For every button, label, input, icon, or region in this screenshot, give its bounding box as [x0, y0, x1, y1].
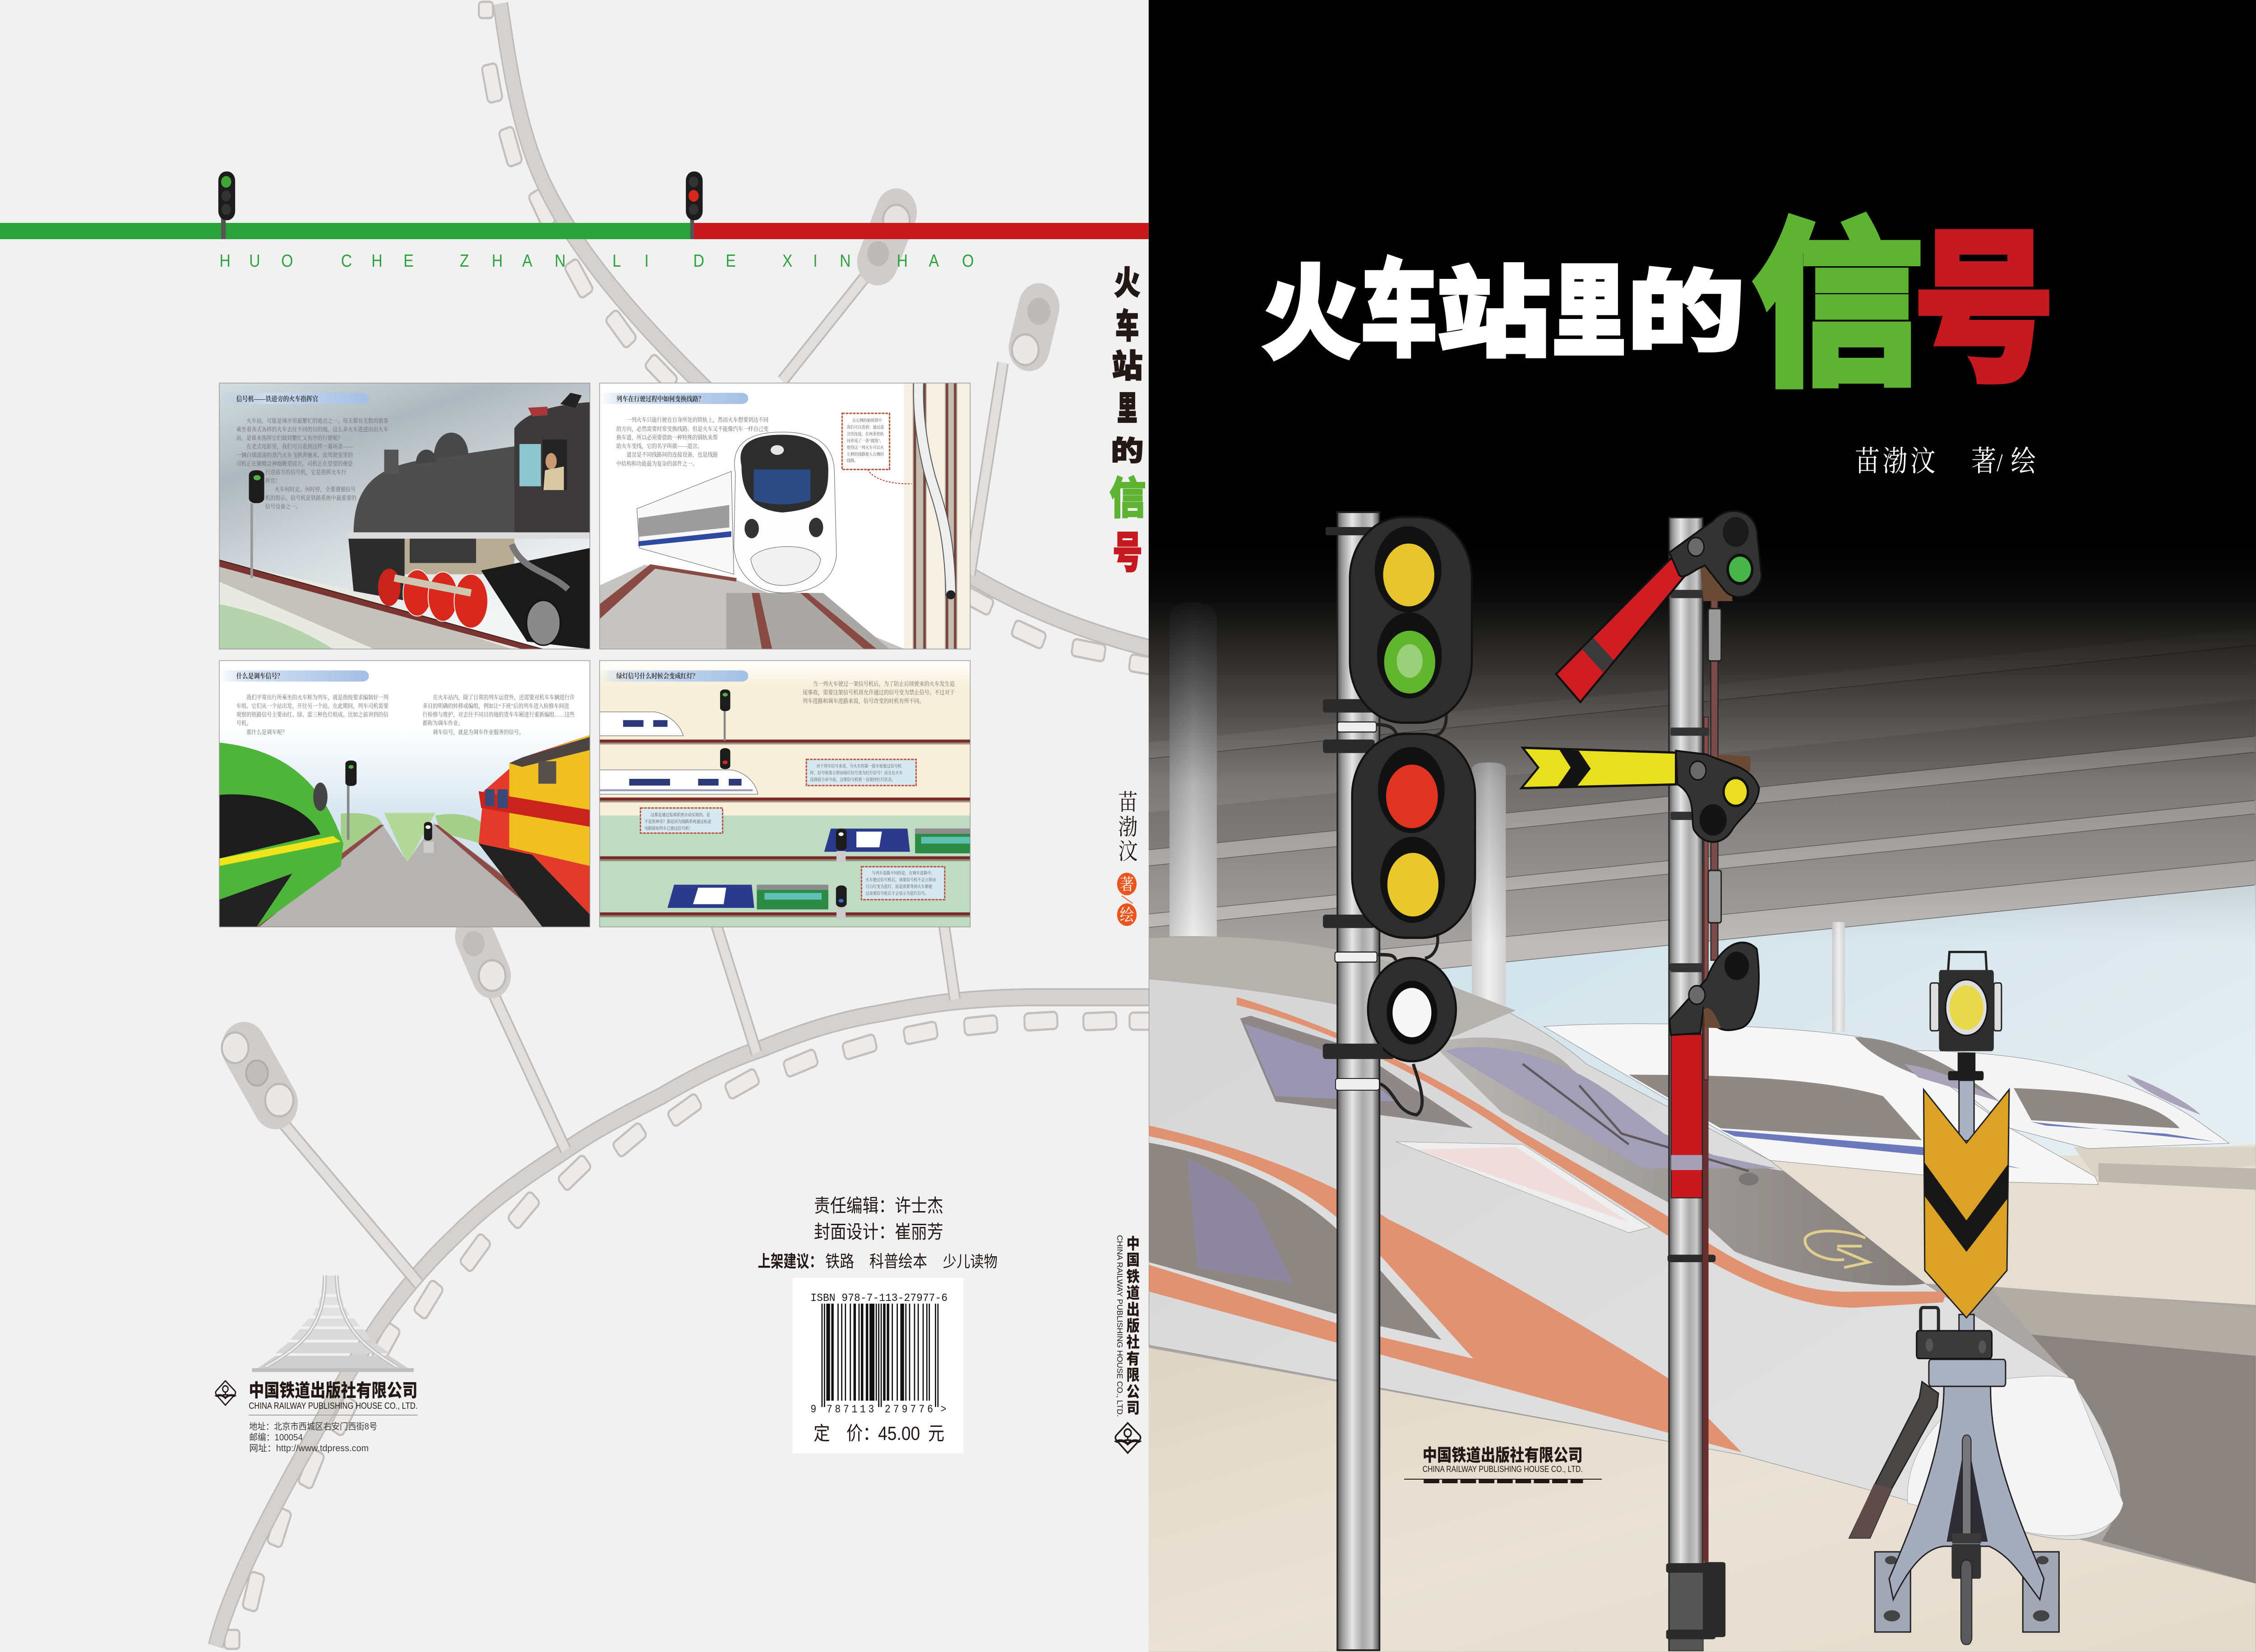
barcode and price box: 787113 — [827, 1404, 874, 1416]
pedestal — [1889, 1386, 2044, 1600]
chevron sign — [1923, 1090, 2009, 1318]
near train — [1149, 936, 2123, 1540]
text: shunting signal page — [236, 672, 575, 736]
text: steam locomotive page: 机的指示。信号机是铁路系统中最重要的 — [265, 494, 356, 501]
signal head: white — [1368, 958, 1456, 1061]
spine publisher: 国 — [1127, 1251, 1140, 1268]
trains and platform — [1149, 936, 2256, 1652]
icon: green signal on bar — [218, 171, 235, 239]
credits block: 封面设计：崔丽芳 — [814, 1222, 943, 1243]
text: high-speed train page: 从右侧的俯视图中 — [852, 417, 882, 423]
green and red signal bar — [0, 223, 1149, 239]
far train — [1911, 1050, 2229, 1148]
text: signal change page: 不是很神奇？那是因为线路系统通过轨道 — [644, 819, 711, 824]
text: shunting signal page: 调车信号，就是为调车作业服务的信号。 — [433, 728, 524, 736]
yellow semaphore arm — [1521, 748, 1676, 788]
text: steam locomotive page — [236, 395, 388, 510]
text: steam locomotive page: 信号设备之一。 — [265, 503, 300, 510]
signal: colour light signal — [1323, 512, 1475, 1650]
spine publisher: 公 — [1127, 1383, 1140, 1400]
text: shunting signal page: 都称为调车作业。 — [423, 719, 463, 727]
spine title — [1110, 265, 1146, 577]
barcode and price box: 9 — [810, 1404, 816, 1416]
spine publisher: 有 — [1127, 1350, 1140, 1367]
title: 火车站里的信号: 号 — [1914, 218, 2054, 402]
publisher english name: CHINA RAILWAY PUBLISHING HOUSE CO., LTD. — [249, 1401, 417, 1411]
text: high-speed train page: 助火车变线，它的名字叫做——道岔。 — [616, 442, 703, 449]
text: steam locomotive page: 一辆白烟滚滚的蒸汽火车飞快奔驰来，而驾驶室里的 — [236, 451, 353, 458]
publisher block: front cover: CHINA RAILWAY PUBLISHING HOUSE CO., LTD. — [1423, 1464, 1583, 1474]
text: high-speed train page: 我们可以看到：通过道 — [847, 424, 884, 430]
publisher block: back cover — [214, 1380, 417, 1453]
signal head: yellow over green — [1350, 517, 1472, 723]
text: steam locomotive page: 站，是谁来指挥它们做到繁忙又有序的行驶呢？ — [236, 434, 343, 441]
spine publisher — [1114, 1235, 1142, 1453]
credits block: 铁路 — [825, 1253, 854, 1271]
text: shunting signal page: 多目的明确的转移或编组，例如让“下班”后的列车进入检修车间进 — [423, 702, 569, 709]
spine title: 信 — [1110, 474, 1146, 523]
barcode and price box — [792, 1278, 964, 1453]
text: high-speed train page: 岔的连接，在两条铁轨 — [847, 431, 884, 437]
credits block: 少儿读物 — [943, 1253, 998, 1270]
spine publisher: CHINA RAILWAY PUBLISHING HOUSE CO., LTD. — [1115, 1235, 1124, 1417]
author line: 绘 — [2011, 445, 2036, 477]
text: shunting signal page: 行检修与维护，对去往不同目的地的货车车厢进行重新编组……这些 — [423, 711, 575, 718]
text: signal change page: 时，信号机需立即由绿灯信号变为红灯信号！而且在火车 — [810, 770, 903, 776]
pale railway track: upper curve — [479, 2, 1163, 676]
panel: steam locomotive page — [219, 383, 590, 649]
spine title: 站 — [1112, 348, 1142, 384]
railway track logo — [252, 1276, 414, 1372]
publisher name: 中国铁道出版社有限公司 — [249, 1380, 417, 1401]
publisher block: front cover — [1404, 1446, 1602, 1483]
panel: signal change page — [600, 661, 970, 927]
spine publisher: 社 — [1127, 1333, 1140, 1351]
title: 火车站里的信号: 信 — [1752, 207, 1923, 407]
text: signal change page: 绿灯信号什么时候会变成红灯？ — [616, 672, 698, 680]
text: signal change page: 没到前方命令前，这架信号机将一直保持红灯状态。 — [810, 777, 895, 782]
text: shunting signal page: 那什么是调车呢？ — [246, 728, 287, 736]
panel: front cover background — [1149, 0, 2256, 1652]
spine author — [1117, 790, 1138, 926]
text: high-speed train page: 列车在行驶过程中如何变换线路？ — [616, 395, 704, 403]
spine publisher: 中 — [1127, 1235, 1140, 1252]
title: 火车站里的信号: 的 — [1627, 263, 1745, 362]
title: 火车站里的信号: 车 — [1361, 252, 1437, 370]
credits block: 责任编辑：许士杰 — [814, 1196, 943, 1217]
icon: spine emblem — [1114, 1423, 1142, 1453]
text: high-speed train page — [616, 395, 884, 467]
barcode and price box: ISBN 978-7-113-27977-6 — [810, 1292, 948, 1304]
signal: shunting indicator with chevron — [1849, 952, 2059, 1645]
text: shunting signal page: 什么是调车信号？ — [236, 672, 283, 680]
text: high-speed train page: 的方向，必然需要时常变换线路。但是火车又不能像汽车一样自己变 — [616, 425, 768, 432]
text: signal change page — [616, 672, 955, 896]
text: high-speed train page: 左侧的线路驶入右侧的 — [847, 451, 884, 457]
spine publisher: 道 — [1127, 1284, 1140, 1301]
text: high-speed train page: 使得这一列火车可以从 — [847, 444, 884, 450]
text: steam locomotive page: 乘坐着各式各样的火车去往不同的目的地。这么多火车进进出出火车 — [236, 426, 388, 433]
credits block — [758, 1196, 998, 1271]
text: high-speed train page: 间形成了一条“渡线”， — [847, 438, 883, 444]
spine author: 苗 — [1118, 790, 1138, 815]
spine author: 渤 — [1118, 815, 1138, 840]
author line: 苗渤汶 — [1855, 445, 1938, 477]
middle semaphore head — [1718, 754, 1750, 771]
address lines: 网址：http://www.tdpress.com — [249, 1443, 369, 1453]
spine publisher: 司 — [1127, 1399, 1140, 1416]
credits block: 科普绘本 — [869, 1253, 927, 1271]
spine title: 的 — [1111, 435, 1144, 467]
spine author: 著 — [1120, 875, 1134, 894]
publisher block: front cover: 中国铁道出版社有限公司 — [1423, 1446, 1583, 1465]
spine author: 绘 — [1120, 906, 1134, 925]
spine publisher: 版 — [1127, 1317, 1140, 1334]
address lines: 地址：北京市西城区右安门西街8号 — [249, 1421, 377, 1431]
price: 价： — [846, 1423, 879, 1444]
pale signal posts behind the back cover — [222, 205, 1051, 1284]
text: signal change page: 过该架信号机后才会显示为蓝灯信号。 — [865, 890, 929, 896]
text: signal change page: 火车驶过信号机后，该架信号机不会立即由 — [865, 877, 936, 883]
price: 元 — [928, 1423, 944, 1444]
text: shunting signal page: 我们平常出行所乘坐的火车称为列车，就是指按要求编制好一列 — [246, 694, 388, 701]
text: high-speed train page: 道岔是不同线路间的连接设备，也是线路 — [627, 451, 718, 458]
text: high-speed train page: 线路。 — [847, 458, 858, 463]
text: signal change page: 电路探知列车已驶过信号机！ — [644, 825, 693, 831]
pale railway track: lower curve — [216, 997, 1162, 1649]
spine publisher: 铁 — [1127, 1268, 1140, 1285]
spine title: 火 — [1114, 265, 1140, 301]
spine title: 里 — [1117, 390, 1137, 427]
title: 火车站里的信号: 火 — [1262, 258, 1360, 372]
text: steam locomotive page: 在老式电影里，我们可以看到这样一幕场景—— — [246, 443, 353, 450]
base plates — [1875, 1552, 1910, 1632]
price: 定 — [814, 1423, 830, 1444]
spine author: 汶 — [1118, 839, 1138, 865]
title: 火车站里的信号: 站 — [1436, 259, 1551, 369]
title: 火车站里的信号 — [1262, 207, 2054, 407]
barcode and price box: > — [940, 1404, 946, 1416]
signal: semaphore — [1521, 511, 1761, 1651]
author line — [1855, 445, 2036, 477]
barcode and price box: 279776 — [885, 1404, 933, 1416]
text: signal change page: 月白灯变为蓝灯，而是需要等到火车都驶 — [865, 884, 932, 889]
text: signal change page: 对于列车信号来说，当火车的第一批车轮驶过信号机 — [816, 763, 901, 769]
icon: publisher emblem — [214, 1381, 237, 1405]
text: signal change page: 尾事故，需要这架信号机将允许通过的信号变为禁止信号。不过对于 — [803, 689, 955, 696]
text: steam locomotive page: 挥官！ — [265, 477, 280, 484]
clamp — [1921, 1308, 1938, 1333]
signal head: red over yellow — [1352, 734, 1475, 938]
text: steam locomotive page: 信号机——铁道旁的火车指挥官 — [236, 395, 318, 403]
text: steam locomotive page: 行进前方的信号机，它是指挥火车行 — [265, 468, 347, 476]
lever — [1849, 1382, 1938, 1538]
text: high-speed train page: 换车道，所以必须要借助一种特殊的钢轨来帮 — [616, 434, 718, 441]
price — [814, 1423, 944, 1444]
text: high-speed train page: 一列火车只能行驶在自身所处的铁轨上，然而火车想要到达不同 — [627, 416, 768, 423]
spine title: 号 — [1113, 529, 1142, 577]
text: signal change page: 这都是通过装填系统自动实现的。是 — [651, 812, 710, 817]
text: shunting signal page: 观察的铁路信号主要由红、绿、蓝三种色灯组成。比如之前讲到的信 — [236, 711, 388, 718]
text: signal change page: 与列车进路不同的是，在调车进路中， — [872, 870, 935, 876]
barcode — [821, 1304, 938, 1407]
spine title: 车 — [1115, 308, 1139, 345]
text: shunting signal page: 号机。 — [236, 719, 251, 727]
panel: high-speed train page — [600, 383, 970, 649]
author line: / — [1997, 449, 2003, 477]
station canopy and sky — [1149, 0, 2256, 1198]
spine publisher: 出 — [1127, 1301, 1140, 1318]
text: steam locomotive page: 火车站，可能是城市里最繁忙的地点之一。每天都有无数的旅客 — [246, 417, 388, 424]
text: high-speed train page: 中结构和功能最为复杂的部件之一。 — [616, 460, 698, 467]
text: steam locomotive page: 火车何时走、何时停，全要遵循信号 — [275, 486, 356, 493]
text: signal change page: 列车进路和调车进路来说，信号改变的时机有所不同。 — [803, 697, 925, 704]
price: 45.00 — [878, 1423, 920, 1444]
panel: shunting signal page — [219, 661, 590, 927]
pinyin line: HUOCHEZHANLIDEXINHAO — [219, 251, 974, 271]
middle train — [1544, 1024, 2099, 1185]
panel: back cover background — [0, 0, 1149, 1652]
author line: 著 — [1971, 445, 1996, 477]
lower semaphore head — [1669, 943, 1759, 1035]
address lines — [249, 1421, 377, 1453]
dark sky gradient overlay — [1149, 0, 2256, 993]
red semaphore arm — [1556, 558, 1686, 702]
upper semaphore head — [1700, 564, 1733, 601]
text: shunting signal page: 在火车站内，除了日常的列车运营外，还需要对机车车辆进行许 — [433, 694, 575, 701]
spine publisher: 限 — [1127, 1366, 1140, 1384]
text: shunting signal page: 车组。它们从一个站出发，开往另一个站。在此期间，列车司机需要 — [236, 702, 388, 709]
address lines: 邮编：100054 — [249, 1432, 303, 1442]
credits block: 上架建议： — [758, 1253, 822, 1271]
title: 火车站里的信号: 里 — [1552, 257, 1626, 369]
text: signal change page: 当一列火车驶过一架信号机后，为了防止后续驶来的火车发生追 — [813, 680, 955, 687]
icon: red signal on bar — [686, 171, 703, 239]
text: steam locomotive page: 司机正在聚精会神地眺望前方。司机正在望望的便是 — [236, 460, 353, 467]
